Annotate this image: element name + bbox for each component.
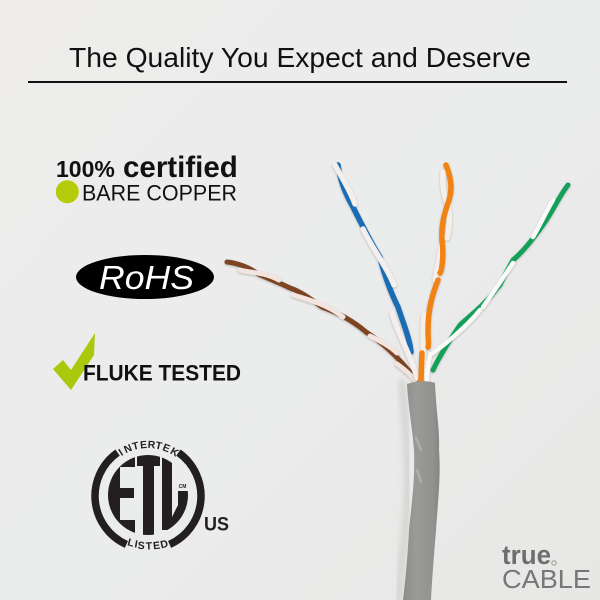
ring text: Listed: I bbox=[134, 538, 139, 551]
ring text: Intertek: K bbox=[168, 445, 181, 460]
logo: trueCABLE bbox=[502, 540, 591, 594]
logo: trueCABLE: true bbox=[502, 540, 551, 570]
ring text: Intertek: R bbox=[147, 439, 156, 451]
registered mark bbox=[552, 561, 556, 565]
ETL letters bbox=[108, 455, 188, 535]
jacket highlights bbox=[416, 438, 421, 482]
ring text: Intertek: E bbox=[161, 442, 172, 455]
wire pair: green bbox=[427, 185, 568, 380]
bare copper label: BARE COPPER bbox=[82, 180, 237, 206]
ring text: Intertek: N bbox=[122, 442, 134, 456]
cable shadow bbox=[398, 383, 408, 600]
wire pair: blue bbox=[335, 165, 417, 378]
us mark: US bbox=[204, 514, 229, 536]
ring text: Listed: S bbox=[137, 540, 145, 552]
ring text: Listed bbox=[126, 536, 170, 553]
outer ring bbox=[95, 453, 126, 544]
ring text: Listed: E bbox=[152, 540, 161, 552]
ring text: Intertek: E bbox=[140, 439, 148, 451]
badge: RoHS: RoHS bbox=[99, 259, 194, 296]
badge: RoHS bbox=[76, 255, 214, 299]
cm mark: CM bbox=[179, 484, 186, 490]
icon: green check mark bbox=[53, 333, 95, 390]
ring text: Listed: D bbox=[159, 538, 170, 551]
ring text: Intertek: T bbox=[131, 440, 141, 453]
badge: 100% certified bare copper bbox=[56, 151, 238, 206]
wire pair: orange bbox=[421, 165, 451, 380]
cable wordmark: CABLE bbox=[502, 564, 591, 594]
fluke label: FLUKE TESTED bbox=[83, 360, 241, 386]
ring text: Intertek bbox=[117, 439, 181, 460]
wire pair: brown bbox=[227, 262, 416, 380]
ring text: Listed: T bbox=[145, 540, 153, 553]
certified heading: 100% bbox=[56, 156, 115, 182]
logo: ETL listed bbox=[95, 439, 229, 553]
ring text: Intertek: T bbox=[154, 440, 164, 453]
icon: green dot bbox=[56, 180, 79, 203]
ring text: Listed: L bbox=[126, 536, 136, 550]
certified heading: certified bbox=[123, 151, 238, 184]
ring text: Intertek: I bbox=[117, 447, 125, 459]
badge: Fluke tested bbox=[53, 333, 241, 390]
cable jacket bbox=[403, 381, 440, 600]
title rule bbox=[28, 81, 567, 83]
cable photo bbox=[227, 165, 568, 600]
title: The Quality You Expect and Deserve bbox=[69, 42, 531, 73]
